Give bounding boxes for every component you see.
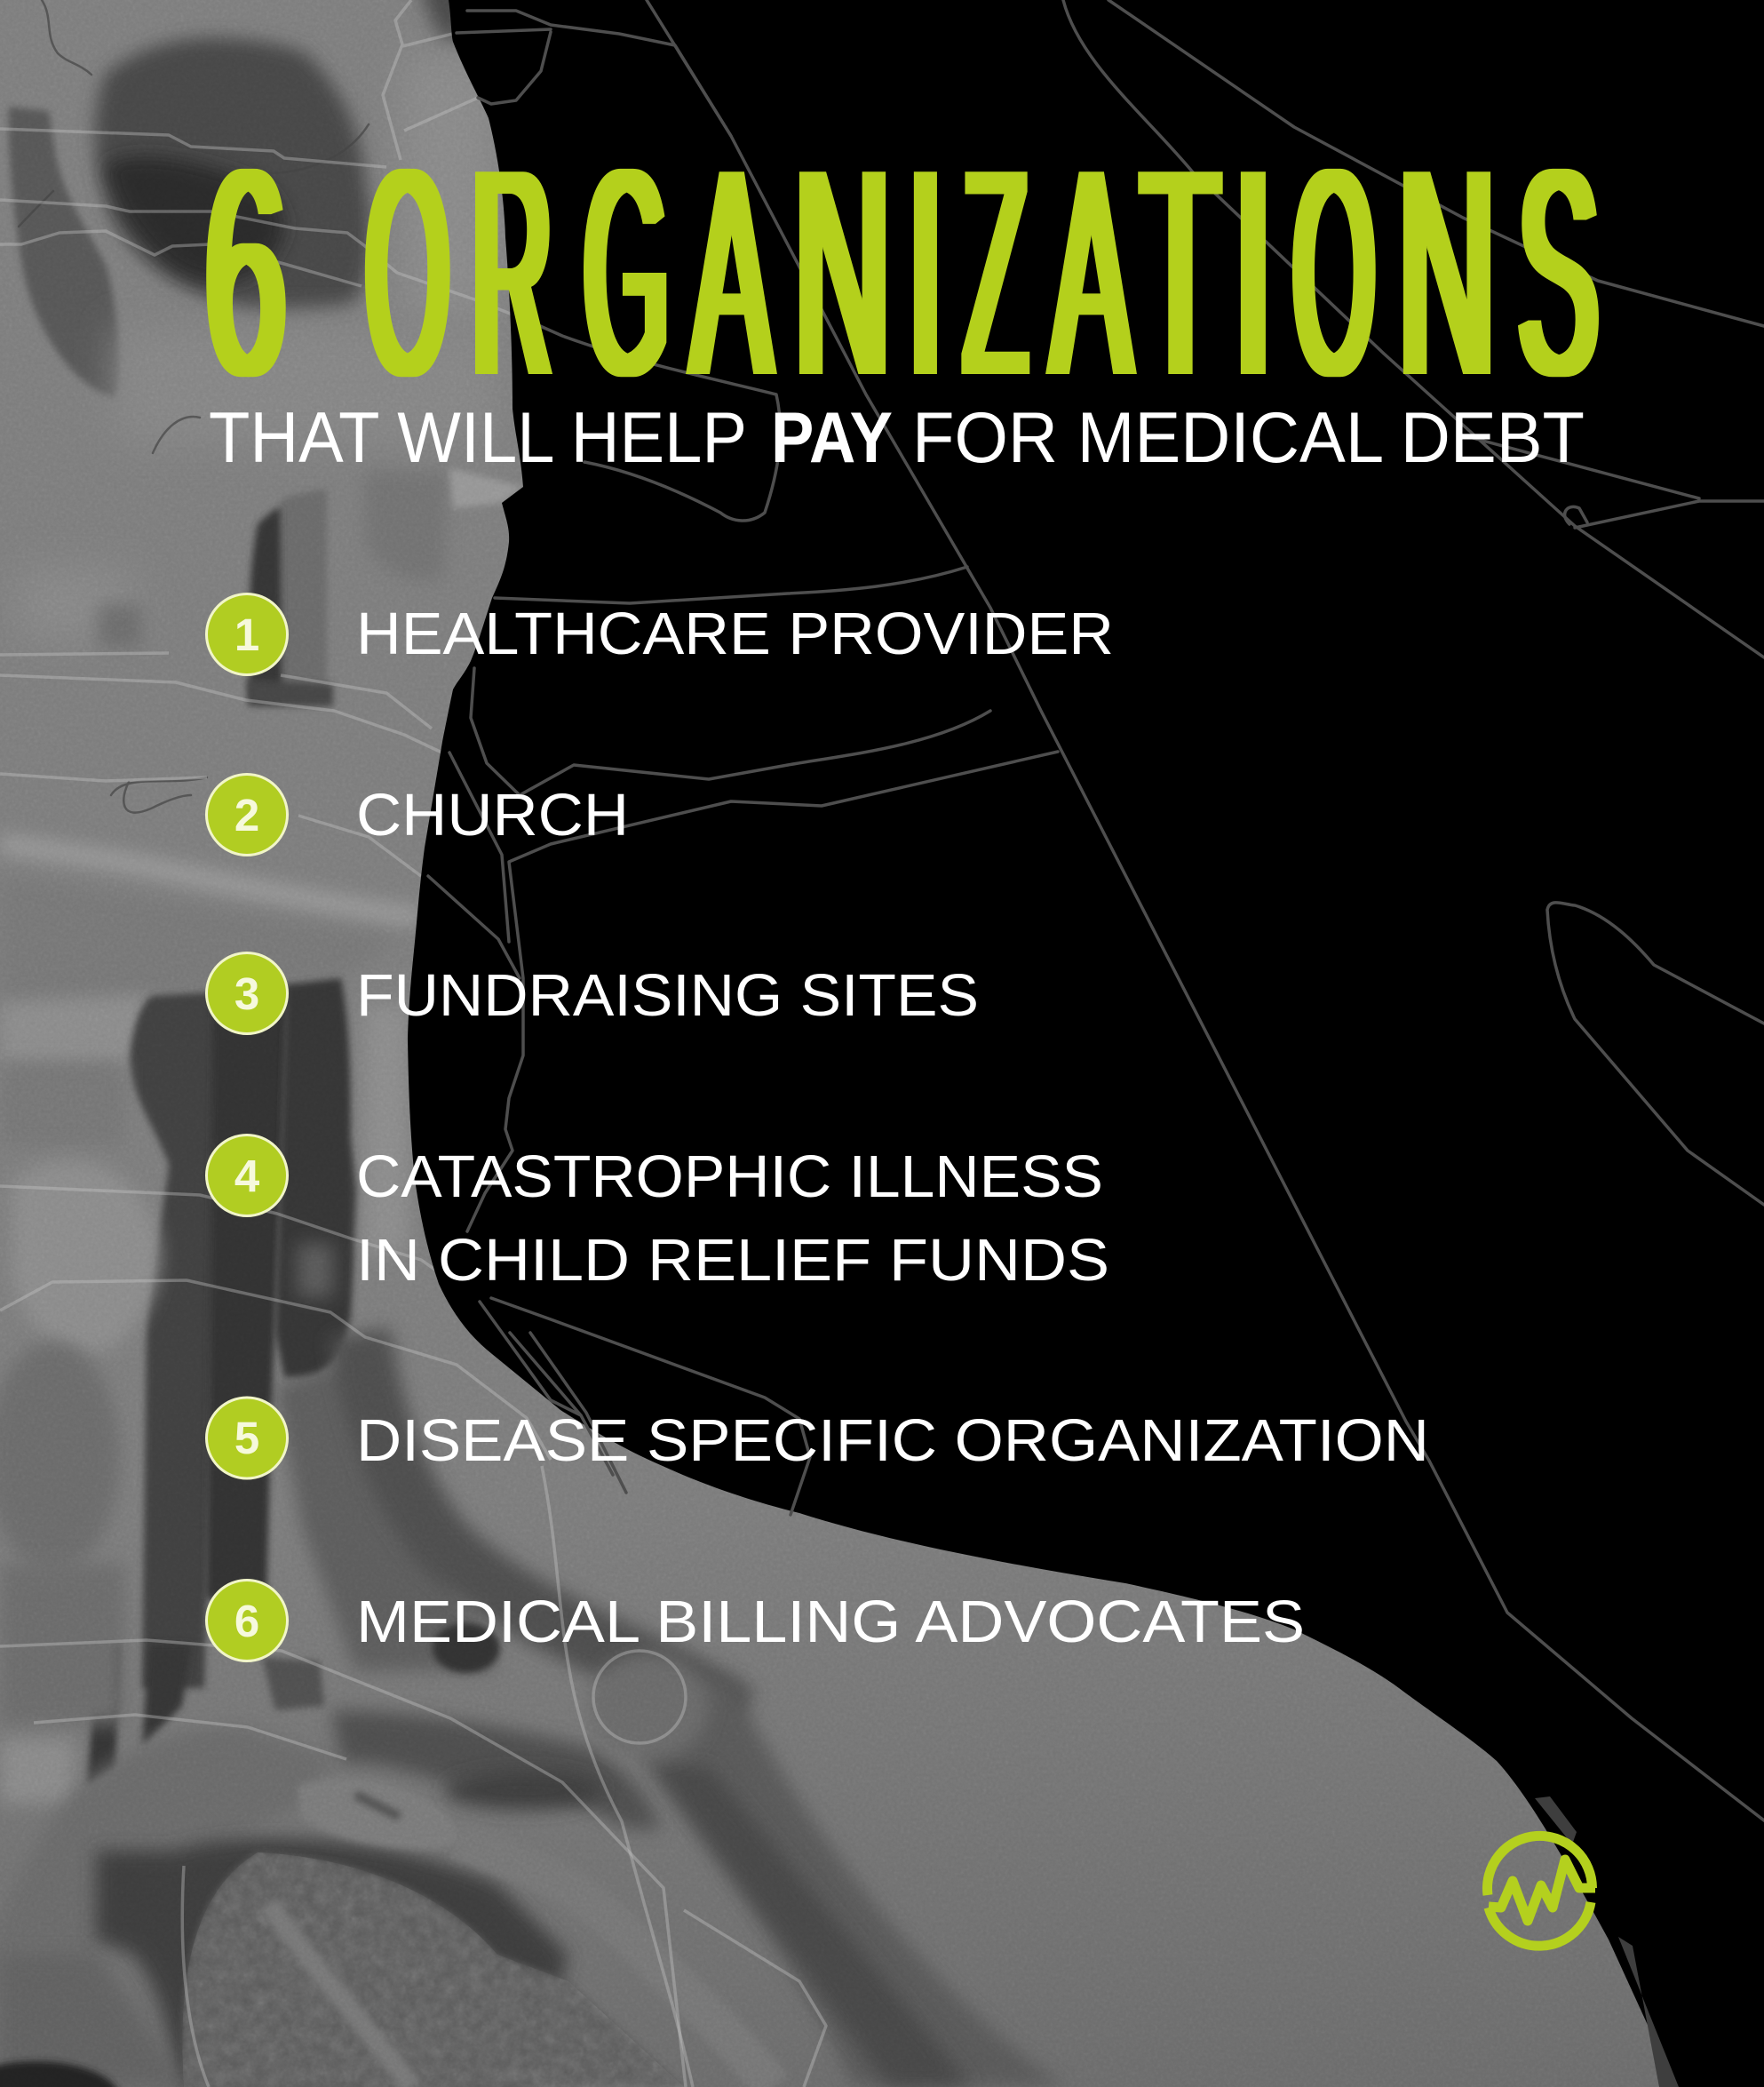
title: A (692, 108, 772, 437)
title: I (1235, 108, 1272, 437)
icon: brand logo with pulse line in ring (1488, 1836, 1595, 1946)
stub shapes beside shoulder (1535, 1796, 1679, 2087)
secondary socket (9, 107, 119, 397)
rib bone (269, 1904, 412, 2087)
title: I (910, 108, 942, 437)
nerve outline lines over black background (428, 0, 1764, 1820)
dark hollow around lung (96, 1838, 568, 2087)
title: A (1052, 108, 1132, 437)
lower column remnants (87, 1644, 324, 1786)
nasal cavity (247, 468, 523, 706)
strands on chest side (360, 1333, 739, 1717)
subtitle: THAT WILL HELP (209, 398, 747, 478)
list item 3: FUNDRAISING SITES (356, 962, 979, 1029)
list item 5 (206, 1398, 1429, 1478)
shading at top of skull (415, 0, 455, 48)
list item 4: 4 (234, 1151, 260, 1201)
list item 1: 1 (234, 609, 259, 660)
list item 4 (206, 1135, 1109, 1294)
list item 5: 5 (234, 1413, 259, 1463)
jaw (0, 844, 421, 1066)
list item 4: CATASTROPHIC ILLNESS (356, 1143, 1103, 1210)
title: N (1398, 108, 1495, 437)
dark strip beside shoulder (640, 1675, 1066, 2087)
subtitle: FOR MEDICAL DEBT (912, 398, 1585, 478)
eye socket (95, 37, 372, 310)
title: 6 (205, 108, 286, 437)
title: O (1293, 108, 1374, 437)
list item 2 (206, 775, 629, 855)
subtitle (209, 398, 1585, 478)
title: O (366, 108, 449, 437)
title: G (584, 108, 668, 437)
list item 4: IN CHILD RELIEF FUNDS (356, 1227, 1109, 1294)
dark veins and sutures (19, 0, 369, 813)
collar band (0, 1710, 662, 2070)
teeth (36, 583, 142, 649)
title: T (1141, 108, 1220, 437)
thyroid area (0, 1062, 160, 1804)
infographic canvas: S (1519, 108, 1598, 437)
pale nerve lines on the body (0, 0, 826, 2087)
list item 1 (206, 593, 1114, 675)
clavicle (298, 1779, 773, 2087)
list item 2: 2 (234, 790, 259, 840)
list item 2: CHURCH (356, 782, 629, 848)
list item 3: 3 (234, 968, 259, 1019)
list item 5: DISEASE SPECIFIC ORGANIZATION (356, 1407, 1429, 1474)
list item 6 (206, 1580, 1305, 1661)
title: Z (965, 108, 1027, 437)
list item 6: MEDICAL BILLING ADVOCATES (356, 1589, 1305, 1655)
title: R (473, 108, 552, 437)
neck columns (130, 978, 497, 1688)
list item 6: 6 (234, 1596, 259, 1646)
left lower chest (0, 1955, 187, 2087)
list item 3 (206, 952, 979, 1034)
list item 1: HEALTHCARE PROVIDER (356, 601, 1114, 667)
title: N (795, 108, 890, 437)
subtitle: PAY (771, 398, 893, 478)
